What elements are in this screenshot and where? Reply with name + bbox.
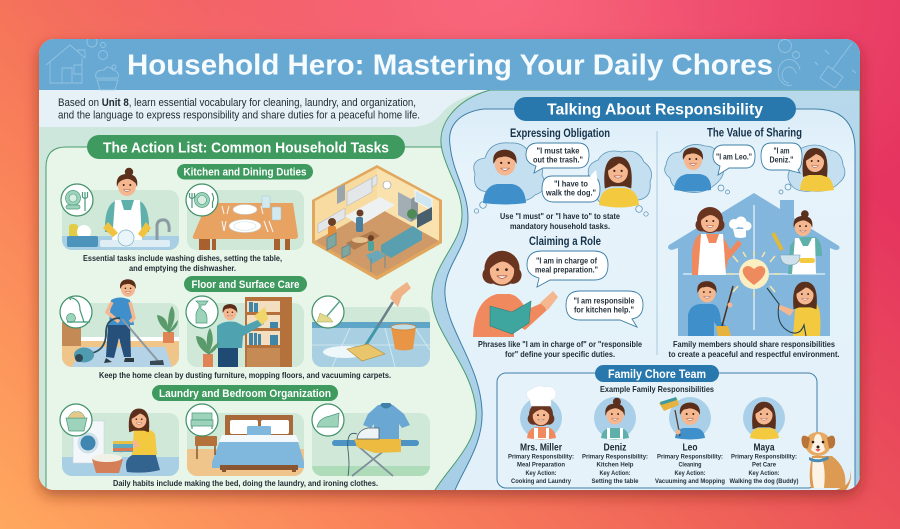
speech bubble: I must take out the trash (526, 143, 589, 173)
caption: claiming a role: Phrases like "I am in charge of" or "responsible (478, 339, 642, 349)
team member: Maya: Maya (754, 442, 775, 454)
intro text (58, 97, 420, 122)
illustration: set table (187, 190, 304, 250)
team member: Mrs. Miller: Cooking and Laundry (511, 478, 571, 485)
team member: Leo: Leo (682, 442, 698, 454)
heading: claiming a role: Claiming a Role (529, 236, 601, 248)
caption: obligation: mandatory household tasks. (510, 221, 610, 231)
team member: Maya: Pet Care (752, 462, 776, 468)
team member: Leo: Cleaning (678, 462, 702, 468)
heading: talking about responsibility pill (514, 97, 796, 121)
caption: obligation (500, 211, 620, 231)
heading: talking about responsibility pill: Talking About Responsibility (547, 102, 763, 118)
speech bubble: I am Leo: "I am Leo." (716, 152, 752, 162)
team member: Deniz: Kitchen Help (596, 462, 634, 468)
caption: kitchen (84, 255, 282, 272)
header band (39, 39, 860, 90)
icon: laundry basket (60, 404, 92, 436)
panel: responsibility outer wave (432, 90, 860, 495)
sun and heart (728, 251, 780, 297)
heading: floor pill (184, 276, 307, 292)
team member: Deniz: Deniz (604, 442, 626, 454)
illustration: mopping (312, 282, 430, 367)
illustration: ironing (312, 403, 430, 476)
speech bubble: I am Deniz (761, 143, 802, 173)
icon: header broom and plate watermark (778, 40, 856, 88)
icon: plates and fork (61, 184, 93, 216)
caption: claiming a role: for" define your specific duties. (505, 349, 615, 359)
infographic card (39, 37, 860, 495)
heading: action list pill: The Action List: Common Household Tasks (103, 140, 389, 156)
illustration: dusting (187, 297, 304, 367)
heading: floor pill: Floor and Surface Care (192, 279, 300, 291)
team member: Leo: Key Action: (674, 470, 706, 477)
illustration: laundry (62, 409, 179, 476)
subheading: example responsibilities: Example Family Responsibilities (600, 384, 714, 394)
heading: value of sharing: The Value of Sharing (707, 128, 802, 140)
team member: Mrs. Miller (508, 386, 574, 485)
team member: Mrs. Miller: Mrs. Miller (520, 442, 562, 454)
team member: Maya: Key Action: (748, 470, 780, 477)
speech bubble: I am in charge of meal preparation: meal preparation." (535, 266, 598, 274)
speech bubble: I am in charge of meal preparation (527, 251, 608, 287)
girl with hose (767, 282, 820, 336)
icon: spray bottle (186, 296, 218, 328)
woman mixing bowl (773, 210, 822, 274)
team member: Mrs. Miller: Primary Responsibility: (508, 454, 574, 460)
heading: laundry pill: Laundry and Bedroom Organization (159, 388, 331, 400)
speech bubble: I am Deniz: "I am (774, 146, 790, 156)
heading: expressing obligation: Expressing Obligation (510, 128, 610, 140)
figure: woman with book (473, 251, 558, 337)
caption: sharing: to create a peaceful and respectful environment. (668, 349, 840, 359)
figure: boy in thought cloud (474, 143, 545, 213)
panel: responsibility inner (445, 109, 855, 495)
team member: Deniz: Primary Responsibility: (582, 454, 648, 460)
team member: Mrs. Miller: Meal Preparation (517, 462, 565, 468)
panel: family chore team (497, 373, 817, 488)
figure: Leo in cloud (665, 144, 730, 194)
speech bubble: I have to walk the dog (542, 170, 600, 202)
figure: Deniz in cloud (779, 145, 845, 194)
boy with broom (688, 281, 733, 336)
caption: sharing: Family members should share responsibilities (673, 339, 835, 349)
team member: Maya (730, 397, 798, 485)
caption: floor: Keep the home clean by dusting furniture, mopping floors, and vacuuming carpets. (99, 370, 391, 380)
speech bubble: I am Leo (713, 145, 755, 175)
team member: Leo: Primary Responsibility: (657, 454, 723, 460)
illustration: washing dishes (62, 168, 179, 250)
icon: header house and bubbles watermark (46, 37, 118, 90)
heading: kitchen pill: Kitchen and Dining Duties (184, 166, 306, 178)
team member: Mrs. Miller: Key Action: (526, 470, 556, 477)
team member: Leo: Vacuuming and Mopping (655, 478, 725, 485)
team member: Maya: Primary Responsibility: (731, 454, 797, 460)
speech bubble: I am responsible for kitchen help: "I am responsible (574, 296, 635, 306)
illustration: dog Buddy (802, 432, 851, 490)
intro text: and the language to express responsibility and share duties for a peaceful home life. (58, 110, 420, 122)
team member: Deniz (582, 397, 648, 485)
title: Household Hero: Mastering Your Daily Chores (127, 50, 773, 82)
speech bubble: I am responsible for kitchen help (566, 291, 643, 327)
heading: laundry pill (152, 385, 338, 401)
speech bubble: I am responsible for kitchen help: for kitchen help." (574, 306, 634, 314)
caption: obligation: Use "I must" or "I have to" to state (500, 211, 620, 221)
caption: kitchen: and emptying the dishwasher. (129, 263, 236, 273)
woman holding chef hat (692, 207, 752, 275)
column divider (656, 131, 658, 355)
speech bubble: I have to walk the dog: walk the dog." (545, 188, 596, 198)
icon: place setting (186, 184, 218, 216)
speech bubble: I am Deniz: Deniz." (770, 156, 794, 164)
heading: action list pill (87, 135, 405, 159)
speech bubble: I have to walk the dog: "I have to (554, 180, 588, 188)
icon: vacuum (60, 296, 92, 328)
caption: claiming a role (478, 339, 642, 359)
icon: bed (186, 404, 218, 436)
illustration: vacuuming (62, 279, 179, 367)
heading: family chore team pill: Family Chore Team (608, 367, 706, 381)
illustration: bed (187, 413, 304, 476)
team member: Deniz: Setting the table (592, 478, 639, 485)
caption: kitchen: Essential tasks include washing dishes, setting the table, (83, 253, 282, 263)
icon: mop (312, 296, 344, 328)
infographic card shadow (39, 39, 860, 490)
speech bubble: I am in charge of meal preparation: "I am in charge of (536, 256, 597, 266)
figure: girl in thought cloud (588, 151, 652, 216)
icon: iron (312, 404, 344, 436)
caption: sharing (668, 339, 840, 359)
team member: Deniz: Key Action: (600, 470, 630, 477)
speech bubble: I must take out the trash: "I must take (536, 146, 580, 156)
intro band (39, 90, 490, 127)
speech bubble: I must take out the trash: out the trash." (533, 156, 583, 164)
illustration: isometric home (312, 165, 442, 280)
intro text: Based on Unit 8, learn essential vocabulary for cleaning, laundry, and organization, (58, 97, 416, 109)
team member: Leo (655, 397, 725, 485)
team member: Maya: Walking the dog (Buddy) (730, 478, 798, 485)
illustration: family house (668, 193, 840, 336)
panel: action list background (46, 146, 476, 490)
caption: laundry: Daily habits include making the bed, doing the laundry, and ironing clothes. (113, 478, 378, 488)
